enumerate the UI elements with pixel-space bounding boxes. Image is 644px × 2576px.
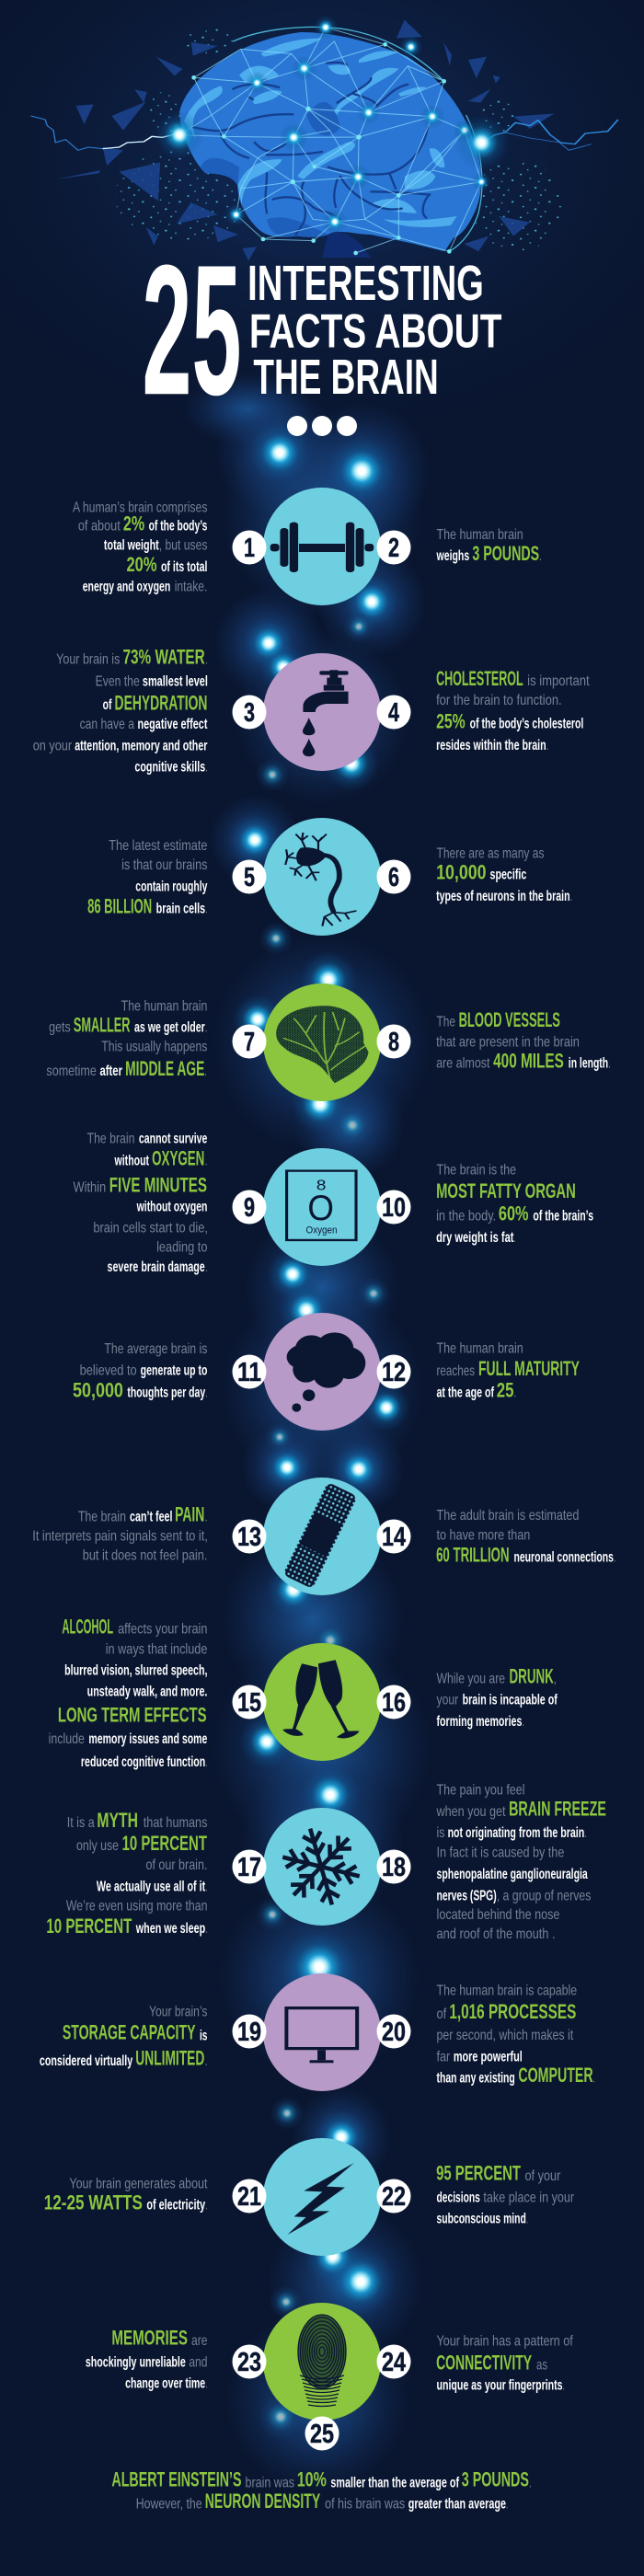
fact 22: subconscious mind — [437, 2211, 526, 2226]
text: MIDDLE AGE — [125, 1057, 204, 1080]
fact 20: of — [437, 2006, 447, 2022]
fact 10 — [436, 1162, 593, 1246]
fact 10: dry weight is fat — [436, 1229, 513, 1245]
fact 24: CONNECTIVITY — [436, 2351, 532, 2374]
fact 13: It interprets pain signals sent to it, — [32, 1528, 208, 1545]
fact 10: 60% — [499, 1202, 529, 1225]
fact 24: as — [536, 2357, 547, 2374]
fact 25: . — [506, 2496, 508, 2513]
fact 11: thoughts per day — [127, 1385, 205, 1400]
number badges — [232, 530, 410, 2451]
fact 3: attention, memory and other — [75, 738, 207, 753]
fact 25: NEURON DENSITY — [205, 2490, 320, 2513]
fact 17: 10 PERCENT — [46, 1915, 132, 1938]
fact 9: brain cells start to die, — [93, 1220, 208, 1236]
text: . — [205, 651, 208, 668]
fact 6: There are as many as — [437, 845, 544, 862]
number badges: 9 — [244, 1193, 255, 1223]
text: . — [205, 1385, 207, 1401]
fact 21: Your brain generates about — [69, 2176, 208, 2192]
number badges: 13 — [237, 1523, 261, 1552]
fact 12: The human brain — [437, 1340, 523, 1357]
fact 7: sometime — [46, 1063, 97, 1079]
number badges: 25 — [310, 2420, 334, 2449]
title: 25 — [142, 226, 241, 433]
fact 9 — [73, 1131, 208, 1275]
fact 1: of about — [78, 518, 121, 535]
fact 3: smallest level — [143, 673, 208, 689]
icon: computer monitor — [284, 2007, 359, 2063]
fact 17: We actually use all of it — [97, 1879, 205, 1894]
fact 17: that humans — [144, 1814, 207, 1831]
number badges: 2 — [388, 534, 399, 563]
fact 12: . — [513, 1385, 516, 1401]
fact 9: without — [114, 1153, 149, 1168]
fact 5: contain roughly — [135, 879, 207, 894]
orbit ring — [233, 27, 482, 251]
fact 13: but it does not feel pain. — [83, 1547, 207, 1564]
fact 16: While you are — [437, 1671, 505, 1687]
fact 17: We’re even using more than — [66, 1898, 207, 1915]
number badges: 18 — [382, 1853, 406, 1882]
fact 1: A human’s brain comprises — [73, 500, 207, 516]
icon: fingerprint — [298, 2315, 346, 2407]
fact 17: when we sleep — [135, 1920, 205, 1936]
text: . — [205, 1754, 207, 1770]
text: . — [205, 2053, 207, 2069]
fact 12: reaches — [437, 1363, 475, 1379]
fact 15: LONG TERM EFFECTS — [58, 1703, 207, 1726]
fact 17 — [46, 1809, 207, 1938]
fact 3: cognitive skills — [134, 759, 205, 775]
fact 7 — [46, 998, 207, 1080]
number badges: 14 — [382, 1523, 406, 1552]
fact 22: . — [526, 2211, 528, 2227]
number badges: 17 — [237, 1853, 261, 1882]
fact 1: of the body’s — [149, 518, 207, 534]
fact 13 — [32, 1502, 208, 1564]
fact 15: blurred vision, slurred speech, — [64, 1662, 207, 1678]
fact 8: are almost — [436, 1055, 490, 1072]
fact 7: The human brain — [121, 998, 207, 1015]
fact 13: The brain — [78, 1509, 126, 1525]
fact 15: in ways that include — [106, 1641, 207, 1658]
fact 18: is — [437, 1824, 444, 1841]
fact 21: 12-25 WATTS — [44, 2191, 143, 2214]
fact 3: Even the — [96, 673, 140, 690]
fact 20: far — [437, 2049, 450, 2065]
fact 12: 25 — [497, 1378, 513, 1401]
text: . — [205, 759, 208, 776]
number badges: 23 — [237, 2348, 261, 2377]
number badges: 8 — [388, 1028, 399, 1057]
fact 24: . — [563, 2377, 565, 2394]
fact 7: gets — [49, 1019, 71, 1036]
fact 2 — [436, 526, 542, 565]
fact 23: are — [191, 2332, 207, 2349]
fact 1: of its total — [161, 558, 207, 574]
fact 4: CHOLESTEROL — [436, 667, 523, 690]
fact 19: considered virtually — [40, 2053, 132, 2068]
fact 25: smaller than the average of — [330, 2475, 460, 2490]
fact 22 — [436, 2161, 574, 2227]
fact 14 — [436, 1507, 616, 1567]
fact 9: without oxygen — [136, 1199, 207, 1214]
text: . — [205, 901, 207, 917]
title: THE BRAIN — [253, 351, 439, 405]
brain highlights — [184, 39, 457, 227]
fact 17: 10 PERCENT — [122, 1832, 207, 1855]
fact 9: Within — [73, 1179, 106, 1196]
fact 16: brain is incapable of — [463, 1692, 558, 1708]
fact 17: It is a — [67, 1814, 95, 1831]
number badges: 15 — [237, 1688, 261, 1718]
fact 9: . — [205, 1153, 207, 1169]
fact 7: as we get older — [134, 1019, 205, 1035]
floating triangles — [55, 20, 555, 260]
icon: oxygen periodic tile: 8 — [316, 1178, 326, 1194]
fact 1: 2% — [123, 512, 144, 535]
text: . — [539, 547, 542, 564]
fact 25 — [111, 2467, 532, 2513]
fact 21: of electricity — [146, 2197, 205, 2213]
fact 3 — [33, 645, 208, 776]
number badges: 6 — [388, 863, 399, 892]
number badges: 4 — [388, 698, 399, 728]
fact 1: 20% — [126, 553, 157, 576]
text: . — [529, 2475, 532, 2491]
icon: neuron — [285, 833, 356, 926]
text: DEHYDRATION — [115, 691, 207, 715]
text: . — [205, 1019, 207, 1036]
fact 15: unsteady walk, and more. — [87, 1684, 207, 1699]
icon: dumbbell — [270, 523, 374, 572]
illustration: glowing brain — [30, 15, 618, 260]
fact 25: brain was — [246, 2475, 294, 2491]
fact 4 — [436, 667, 590, 753]
fact 10: . — [513, 1229, 516, 1246]
fact 3: on your — [33, 738, 72, 754]
fact 18: and roof of the mouth . — [437, 1926, 556, 1942]
fact 23: MEMORIES — [111, 2326, 188, 2350]
fact 23 — [86, 2326, 207, 2392]
fact 9: cannot survive — [139, 1131, 207, 1146]
text: OXYGEN — [152, 1146, 204, 1170]
number badges: 11 — [237, 1358, 261, 1387]
fact 6: 10,000 — [436, 860, 487, 883]
number badges: 20 — [382, 2018, 406, 2047]
fact 11 — [73, 1340, 207, 1402]
text: . — [593, 2070, 595, 2087]
fact 7: This usually happens — [101, 1039, 207, 1055]
fact 13: can’t feel — [130, 1509, 172, 1524]
icon: thought cloud — [287, 1332, 365, 1412]
fact 16: , — [554, 1671, 557, 1687]
fact 25: of his brain was — [325, 2496, 405, 2513]
icon: water faucet — [303, 670, 349, 756]
fact 9: severe brain damage — [108, 1259, 205, 1274]
fact 3: can have a — [80, 716, 134, 732]
fact 9: FIVE MINUTES — [109, 1173, 207, 1197]
number badges: 19 — [237, 2018, 261, 2047]
fact 3: of — [103, 696, 112, 712]
icon: lightning bolt — [287, 2163, 354, 2235]
fact 19 — [40, 2004, 207, 2069]
fact 4: for the brain to function. — [436, 692, 562, 708]
neural mesh — [179, 28, 481, 253]
three dots divider — [287, 416, 357, 436]
fact 24 — [436, 2333, 573, 2394]
fact 1: energy and oxygen — [83, 579, 170, 594]
brain sulci — [193, 63, 430, 235]
fact 25: However, the — [136, 2496, 202, 2513]
header background glow — [0, 0, 644, 460]
fact 25: 3 POUNDS — [462, 2467, 529, 2491]
fact 15 — [49, 1615, 207, 1770]
fact 12 — [437, 1340, 580, 1401]
fact 13: . — [205, 1509, 207, 1525]
fact 8 — [436, 1008, 611, 1073]
fact 18 — [436, 1782, 606, 1942]
text: . — [205, 1259, 207, 1275]
fact 16 — [437, 1664, 558, 1730]
fact 8: 400 MILES — [493, 1049, 564, 1073]
brain shaded lobes — [201, 102, 340, 237]
text: is — [200, 2028, 207, 2043]
fact 10: The brain is the — [437, 1162, 516, 1179]
fact 6 — [436, 845, 572, 904]
fact 7: after — [99, 1063, 122, 1078]
text: . — [205, 1879, 207, 1895]
fact 5: is that our brains — [121, 857, 207, 873]
number badges: 3 — [244, 698, 255, 728]
fact 14: 60 TRILLION — [436, 1543, 510, 1567]
background glows column — [184, 373, 432, 2493]
fact 9: The brain — [87, 1131, 134, 1147]
fact 3: negative effect — [138, 716, 207, 731]
fact 4: is important — [527, 673, 590, 689]
fact 2: 3 POUNDS — [472, 542, 539, 565]
fact 22: of your — [524, 2168, 560, 2184]
icon: oxygen periodic tile: Oxygen — [306, 1225, 337, 1236]
fact 25: 10% — [297, 2467, 327, 2491]
fact 8: The — [437, 1014, 455, 1030]
fact 3: 73% WATER — [122, 645, 205, 669]
icon: oxygen periodic tile — [287, 1171, 356, 1240]
fact 5 — [87, 837, 207, 918]
fact 1 — [73, 500, 207, 595]
fact 2: The human brain — [437, 526, 523, 543]
icon: brain vessels — [276, 1006, 368, 1083]
fact 11: The average brain is — [104, 1340, 207, 1357]
fact 18: when you get — [436, 1803, 506, 1820]
fact 2: weighs — [436, 547, 469, 563]
lightning bolts — [30, 116, 618, 150]
fact 22: take place in your — [483, 2190, 574, 2206]
fact 21 — [44, 2176, 208, 2214]
fact 17: of our brain. — [145, 1857, 207, 1873]
fact 1: total weight — [104, 537, 159, 553]
number badges: 10 — [382, 1193, 406, 1223]
fact 5: brain cells — [156, 901, 205, 916]
fact 16: forming memories — [437, 1713, 522, 1729]
fact 1: , but uses — [159, 537, 207, 554]
number badges: 12 — [382, 1358, 406, 1387]
fact 12: at the age of — [437, 1385, 495, 1400]
fact 25: greater than average — [408, 2496, 506, 2512]
fact 23: change over time — [125, 2375, 205, 2391]
fact 23: and — [189, 2354, 207, 2371]
number badges: 1 — [244, 534, 255, 563]
fact 9: leading to — [156, 1239, 207, 1256]
fact 19: Your brain’s — [149, 2004, 207, 2020]
brain node glows — [155, 15, 509, 235]
fact 20: than any existing — [437, 2070, 515, 2086]
fact 1: intake. — [175, 579, 207, 595]
icon: champagne flutes — [282, 1660, 360, 1738]
fact 5: 86 BILLION — [87, 894, 152, 918]
fact 23: shockingly unreliable — [86, 2354, 186, 2370]
fact 22: decisions — [437, 2190, 480, 2205]
fact 16: . — [522, 1713, 524, 1730]
fact 11: generate up to — [141, 1363, 207, 1378]
fact 16: your — [437, 1692, 458, 1708]
text: . — [570, 888, 572, 904]
fact 11: 50,000 — [73, 1378, 123, 1402]
number badges: 21 — [237, 2182, 261, 2212]
icon: oxygen periodic tile: O — [307, 1187, 334, 1227]
text: . — [205, 1920, 207, 1937]
fact 3: Your brain is — [56, 651, 120, 668]
fact 18: The pain you feel — [437, 1782, 524, 1799]
fact 20: more powerful — [454, 2049, 523, 2064]
text: UNLIMITED — [135, 2046, 204, 2069]
cerebellum shadow — [322, 232, 371, 258]
fact 19: STORAGE CAPACITY — [63, 2020, 195, 2044]
fact 5: The latest estimate — [109, 837, 207, 854]
fact 17: MYTH — [97, 1809, 138, 1832]
fact 15: include — [49, 1731, 85, 1747]
number badges: 16 — [382, 1688, 406, 1718]
fact 4: resides within the brain — [436, 737, 546, 753]
fact 10: in the body. — [436, 1208, 496, 1225]
fact 6: specific — [490, 867, 526, 882]
fact 15: affects your brain — [118, 1621, 207, 1638]
fact 4: . — [546, 737, 548, 753]
fact 7: . — [204, 1063, 207, 1079]
fact 22: 95 PERCENT — [436, 2161, 521, 2184]
text: . — [608, 1055, 611, 1072]
number badges: 5 — [244, 863, 255, 892]
small mesh nodes — [191, 42, 452, 255]
particle clouds — [115, 28, 563, 251]
fact 18: . — [584, 1824, 587, 1841]
fact 15: ALCOHOL — [62, 1615, 113, 1639]
icon: snowflake — [281, 1826, 362, 1907]
number badges: 7 — [244, 1028, 255, 1057]
fact 11: believed to — [80, 1363, 137, 1379]
icon circles — [263, 488, 381, 2421]
number badges: 22 — [382, 2182, 406, 2212]
fact 17: only use — [76, 1837, 119, 1854]
fact 18: nerves (SPG) — [437, 1888, 497, 1903]
brain silhouette — [179, 32, 481, 251]
fact 20 — [437, 1983, 595, 2087]
text: . — [205, 2375, 207, 2392]
fact 4: 25% — [436, 709, 466, 733]
number badges: 24 — [382, 2348, 406, 2377]
fact 18: located behind the nose — [437, 1906, 559, 1923]
fact 25: ALBERT EINSTEIN’S — [111, 2467, 241, 2491]
fact 15: reduced cognitive function — [81, 1754, 205, 1769]
text: . — [205, 2197, 207, 2214]
icon: bandage — [282, 1482, 358, 1589]
fact 13: PAIN — [175, 1502, 204, 1525]
fact 14: to have more than — [437, 1527, 530, 1544]
text: . — [614, 1549, 616, 1566]
fact 7: SMALLER — [74, 1013, 131, 1037]
text: DRUNK — [510, 1664, 554, 1687]
fact 15: memory issues and some — [88, 1731, 207, 1746]
